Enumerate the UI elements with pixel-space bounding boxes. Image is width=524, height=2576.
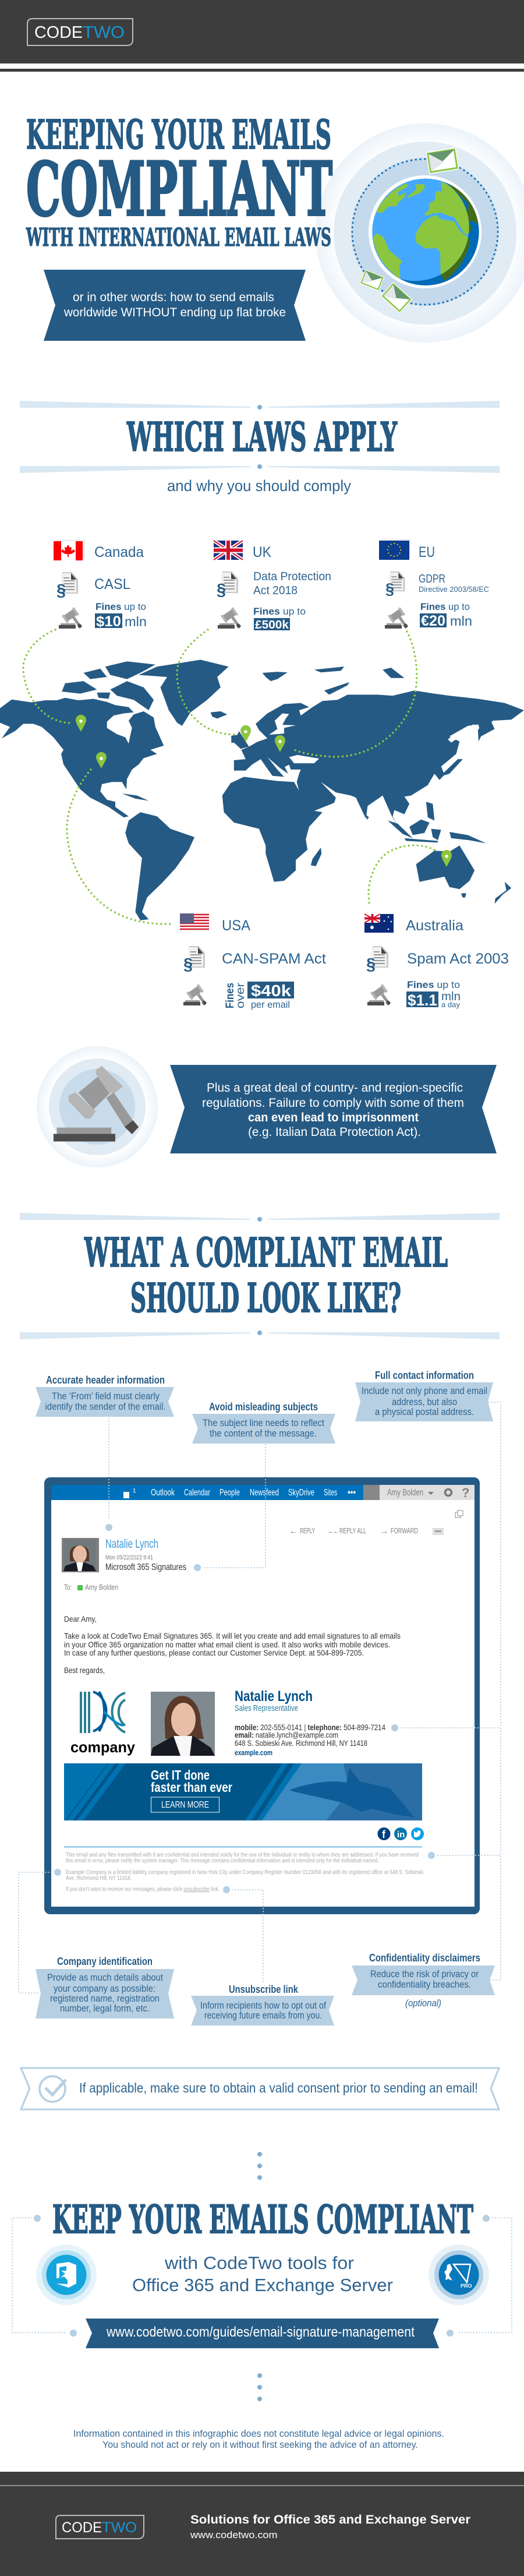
toolbar xyxy=(289,1511,463,1536)
fine amount: $10 xyxy=(96,613,121,630)
callout: full contact information: Full contact information xyxy=(375,1370,474,1381)
header bar xyxy=(0,0,524,72)
signature: contact text: Sales Representative xyxy=(235,1703,298,1713)
signature: contact text: email: natalie.lynch@example.com xyxy=(235,1730,338,1739)
icon: law document: § xyxy=(56,581,66,600)
icon: gavel xyxy=(385,607,408,629)
panel: Canada: Fines up to xyxy=(95,601,146,612)
toolbar: REPLY ALL xyxy=(339,1526,366,1535)
panel: EU xyxy=(379,539,489,629)
footer xyxy=(0,2472,524,2576)
water overlays xyxy=(269,714,319,763)
callout: full contact information: a physical postal address. xyxy=(375,1406,474,1417)
heading: what a compliant email xyxy=(84,1230,448,1322)
nav bar: SkyDrive xyxy=(288,1488,314,1498)
icon: CodeTwo PRO tool xyxy=(429,2245,489,2305)
callout: confidentiality disclaimers: Confidentiality disclaimers xyxy=(369,1952,480,1964)
fine amount: £500k xyxy=(255,619,289,631)
icon: law document xyxy=(56,572,78,600)
fine label rotated: Fines xyxy=(224,983,236,1008)
fine amount: $1.1 xyxy=(408,991,437,1009)
callout: confidentiality disclaimers xyxy=(352,1952,495,2009)
icon: law document xyxy=(183,946,205,974)
icon: law document: § xyxy=(366,955,376,974)
divider bottom xyxy=(20,464,500,473)
icon: gavel xyxy=(59,607,82,629)
panel: Australia: Australia xyxy=(406,918,463,934)
toolbar: ← xyxy=(289,1526,298,1536)
social icons xyxy=(377,1827,424,1840)
subtitle banner: or in other words: how to send emails xyxy=(73,291,274,304)
imprisonment banner: regulations. Failure to comply with some of them xyxy=(202,1096,464,1110)
fine label rotated: over xyxy=(235,982,247,1008)
icon: globe with envelopes xyxy=(316,123,524,343)
divider top xyxy=(20,401,500,410)
divider top xyxy=(20,1213,500,1222)
main title xyxy=(26,112,332,252)
footer text xyxy=(190,2513,470,2540)
email body text: In case of any further questions, please contact our Customer Service Dept. at 504-899-7205. xyxy=(64,1648,364,1657)
panel: Canada xyxy=(54,539,147,630)
signature: promo banner xyxy=(64,1763,422,1820)
nav bar: Calendar xyxy=(184,1488,210,1498)
panel: Australia: Fines up to xyxy=(407,979,460,990)
callout: company identification: Company identification xyxy=(57,1956,153,1967)
footer logo: CODE xyxy=(62,2519,102,2536)
icon: law document xyxy=(385,571,405,598)
fine amount xyxy=(406,990,461,1009)
icon: flag of USA xyxy=(180,913,209,932)
footer text: www.codetwo.com xyxy=(190,2529,277,2540)
sender header xyxy=(62,1537,186,1592)
toolbar: REPLY xyxy=(300,1526,315,1535)
three dots xyxy=(257,2373,262,2401)
icon: law document xyxy=(366,946,388,974)
logo: CodeTwo: CODE xyxy=(34,23,83,42)
callout: full contact information: address, but also xyxy=(392,1396,457,1407)
icon: flag of EU xyxy=(379,539,410,560)
icon: check mark xyxy=(40,2076,66,2102)
callout: avoid misleading subjects: The subject line needs to reflect xyxy=(203,1417,324,1428)
nav bar: 1 xyxy=(133,1488,136,1494)
fine amount: mln xyxy=(441,990,461,1003)
callout: unsubscribe link xyxy=(191,1984,334,2025)
toolbar: ••• xyxy=(435,1529,441,1535)
signature: contact text: 648 S. Sobieski Ave. Richmond Hill, NY 11418 xyxy=(235,1738,367,1748)
fine amount: mln xyxy=(450,613,472,629)
icon: large gavel xyxy=(37,1046,158,1167)
email body text: Take a look at CodeTwo Email Signatures 365. It will let you create and add email signatures to all emails xyxy=(64,1631,401,1640)
panel: EU: Fines up to xyxy=(420,601,470,612)
nav bar: People xyxy=(219,1488,240,1498)
callout: full contact information: Include not only phone and email xyxy=(362,1385,487,1396)
dotted connectors: email annotations xyxy=(19,1402,501,1993)
callout: unsubscribe link: Inform recipients how to opt out of xyxy=(200,2000,326,2011)
logo: CodeTwo xyxy=(27,19,133,45)
social icons: in xyxy=(397,1830,405,1840)
icon: gavel xyxy=(367,984,391,1005)
footer text: Solutions for Office 365 and Exchange Server xyxy=(190,2513,470,2526)
call to action text: with CodeTwo tools for xyxy=(164,2253,354,2273)
sender header: Microsoft 365 Signatures xyxy=(105,1562,186,1572)
toolbar: FORWARD xyxy=(391,1526,418,1535)
footer logo: TWO xyxy=(102,2519,137,2536)
panel: UK: UK xyxy=(253,544,271,560)
icon: flag of Australia xyxy=(364,914,394,933)
URL banner: www.codetwo.com/guides/email-signature-management xyxy=(106,2324,415,2340)
fine amount xyxy=(95,613,147,630)
signature: promo banner: LEARN MORE xyxy=(161,1800,209,1810)
three dots xyxy=(257,2152,262,2180)
fine amount: a day xyxy=(441,1000,460,1009)
legal disclaimer xyxy=(73,2428,444,2450)
icon: flag of Canada xyxy=(54,539,85,560)
panel: UK: Fines up to xyxy=(253,606,306,617)
sender header: Mon 05/22/2023 9:41 xyxy=(105,1554,153,1561)
panel: Australia: Spam Act 2003 xyxy=(407,951,509,967)
fine amount xyxy=(420,613,472,629)
world map xyxy=(0,660,524,920)
legal footer text: This email and any files transmitted with it are confidential and intended solely for the use of the individual or entity to whom they are addressed. If you have received xyxy=(66,1852,419,1858)
callout: unsubscribe link: Unsubscribe link xyxy=(229,1984,299,1995)
email body text: in your Office 365 organization no matter what email client is used. It also works with mobile devices. xyxy=(64,1640,390,1649)
panel: USA: USA xyxy=(222,918,250,934)
fine amount: mln xyxy=(125,614,147,629)
callout: full contact information xyxy=(355,1370,493,1421)
panel: Canada: CASL xyxy=(94,576,130,592)
fine amount xyxy=(247,982,294,1010)
nav bar: ? xyxy=(462,1485,469,1500)
nav bar: Amy Bolden xyxy=(387,1488,423,1498)
panel: USA xyxy=(180,913,326,1010)
callout: company identification: number, legal form, etc. xyxy=(60,2003,150,2014)
sender header: Natalie Lynch xyxy=(105,1537,158,1551)
URL banner xyxy=(86,2319,439,2348)
nav bar: ••• xyxy=(348,1488,356,1498)
callout: company identification: Provide as much details about xyxy=(47,1972,163,1983)
icon: law document: § xyxy=(217,581,226,599)
legal footer text xyxy=(66,1852,423,1893)
icon: CodeTwo PRO tool: PRO xyxy=(461,2283,472,2289)
icon: law document: § xyxy=(385,580,394,598)
panel: UK: Data Protection xyxy=(253,570,331,583)
map pins xyxy=(76,715,452,867)
social icons: f xyxy=(382,1829,386,1840)
nav bar: Newsfeed xyxy=(250,1488,279,1498)
consent notice: If applicable, make sure to obtain a valid consent prior to sending an email! xyxy=(79,2080,478,2095)
imprisonment banner: (e.g. Italian Data Protection Act). xyxy=(248,1125,421,1139)
call to action text xyxy=(132,2253,393,2295)
icon: law document xyxy=(217,571,238,599)
panel: EU: EU xyxy=(419,544,435,560)
nav bar: Sites xyxy=(324,1488,337,1498)
imprisonment banner: Plus a great deal of country- and region-specific xyxy=(207,1081,463,1095)
nav bar: Outlook xyxy=(151,1488,175,1498)
icon: Email Signatures 365 xyxy=(36,2245,97,2305)
toolbar: ←← xyxy=(328,1526,339,1536)
callout: avoid misleading subjects: the content of the message. xyxy=(210,1428,317,1439)
panel: Australia xyxy=(364,914,509,1009)
callout: company identification: registered name, registration xyxy=(50,1993,160,2004)
callout: confidentiality disclaimers: Reduce the risk of privacy or xyxy=(370,1968,479,1979)
legal disclaimer: Information contained in this infographic does not constitute legal advice or legal opinions. xyxy=(73,2428,444,2439)
subheading: and why you should comply xyxy=(167,477,351,495)
email body text: Dear Amy, xyxy=(64,1614,97,1624)
callout: accurate header information: Accurate header information xyxy=(46,1374,165,1386)
footer logo xyxy=(56,2515,144,2539)
icon: flag of UK xyxy=(214,541,243,560)
dotted connectors: map to countries xyxy=(23,630,434,924)
signature: promo banner: faster than ever xyxy=(151,1780,232,1795)
panel: USA: CAN-SPAM Act xyxy=(222,951,326,967)
imprisonment banner xyxy=(170,1065,497,1153)
imprisonment banner: can even lead to imprisonment xyxy=(248,1111,419,1124)
icon: gavel xyxy=(183,984,207,1005)
icon: gavel xyxy=(218,607,241,629)
legal footer text: Example Company is a limited liability company registered in New York City under Company Register Number 0123456 and with its registered office at 648 S. Sobieski xyxy=(66,1869,423,1876)
email window xyxy=(44,1477,480,1914)
dotted frame xyxy=(12,2215,512,2337)
subtitle banner xyxy=(44,270,306,341)
signature: contact text: mobile: 202-555-0141 | telephone: 504-899-7214 xyxy=(235,1723,385,1732)
fine label rotated xyxy=(224,982,247,1008)
legal footer text: this email in error, please notify the system manager. This message contains confidential information and is intended only for the individual named. xyxy=(66,1858,379,1864)
signature: promo banner: Get IT done xyxy=(151,1767,210,1783)
callout: confidentiality disclaimers: confidentiality breaches. xyxy=(378,1979,471,1990)
sender header: Amy Bolden xyxy=(85,1583,118,1592)
callout: accurate header information xyxy=(36,1374,174,1417)
email body text xyxy=(64,1614,401,1675)
fine amount: per email xyxy=(251,999,290,1010)
signature: contact text: Natalie Lynch xyxy=(235,1688,313,1705)
signature: company logo xyxy=(70,1692,136,1756)
icon: law document: § xyxy=(183,955,193,974)
nav bar xyxy=(51,1485,475,1500)
toolbar: → xyxy=(380,1526,388,1536)
callout: company identification xyxy=(36,1956,174,2019)
panel: EU: GDPR xyxy=(419,573,445,585)
legal footer text: Ave. Richmond Hill, NY 11418. xyxy=(66,1875,132,1882)
signature: photo xyxy=(151,1692,215,1756)
panel: UK xyxy=(214,541,331,631)
fine amount: $40k xyxy=(251,982,291,1000)
legal footer text: If you don't want to receive our messages, please click unsubscribe link. xyxy=(66,1886,219,1893)
signature: company logo: company xyxy=(70,1738,136,1756)
callout: avoid misleading subjects xyxy=(192,1401,335,1444)
panel: EU: Directive 2003/58/EC xyxy=(419,585,489,594)
consent notice xyxy=(21,2068,499,2109)
logo: CodeTwo: TWO xyxy=(83,23,125,42)
signature: contact text: example.com xyxy=(235,1748,272,1757)
panel: UK: Act 2018 xyxy=(253,584,298,597)
signature: contact text xyxy=(235,1688,385,1757)
fine amount: €20 xyxy=(421,613,445,629)
divider bottom xyxy=(20,1331,500,1339)
callout: accurate header information: identify the sender of the email. xyxy=(45,1401,165,1412)
call to action text: Office 365 and Exchange Server xyxy=(132,2275,393,2295)
sender header: To: xyxy=(64,1583,72,1592)
subtitle banner: worldwide WITHOUT ending up flat broke xyxy=(63,306,286,319)
legal disclaimer: You should not act or rely on it without first seeking the advice of an attorney. xyxy=(102,2439,418,2450)
callout: confidentiality disclaimers: (optional) xyxy=(405,1998,441,2009)
email body text: Best regards, xyxy=(64,1665,105,1675)
callout: accurate header information: The ‘From’ field must clearly xyxy=(52,1391,160,1402)
callout: avoid misleading subjects: Avoid misleading subjects xyxy=(209,1401,318,1413)
panel: Canada: Canada xyxy=(94,544,144,560)
callout: unsubscribe link: receiving future emails from you. xyxy=(204,2010,322,2021)
callout: company identification: your company as possible: xyxy=(54,1983,155,1994)
